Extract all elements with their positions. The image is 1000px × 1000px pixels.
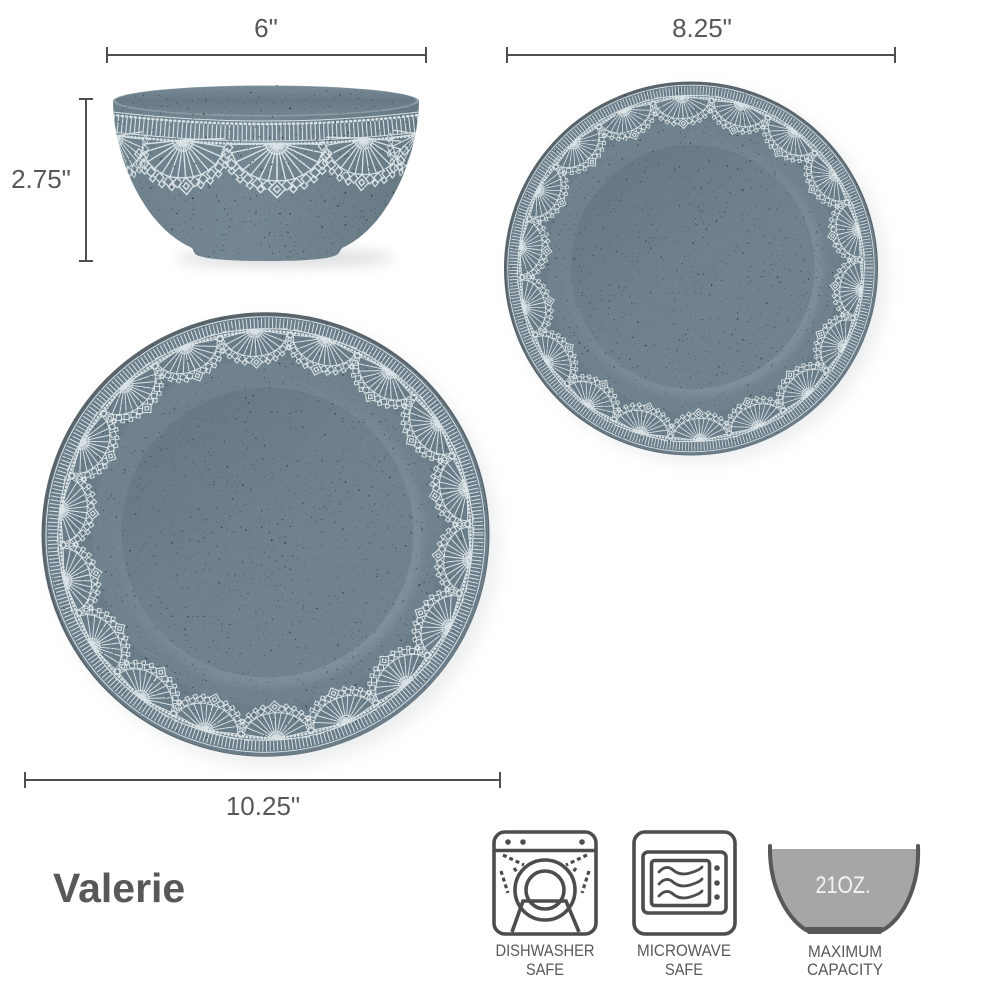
label: maximum capacity: CAPACITY: [807, 960, 883, 979]
label: dishwasher safe: [496, 941, 594, 979]
icon: dishwasher safe: [494, 832, 596, 934]
dimension: bowl width 6 inches: 6": [254, 13, 278, 43]
icon: bowl capacity 21 oz: [770, 846, 918, 934]
icon: microwave safe: [634, 832, 735, 934]
label: microwave safe: [637, 941, 731, 979]
dimension: bowl width 6 inches: [107, 13, 426, 63]
bowl: speckled lace bowl with rim: [113, 85, 419, 272]
title: pattern name: Valerie: [53, 865, 185, 911]
label: maximum capacity: MAXIMUM: [808, 942, 882, 961]
large plate shadow: [53, 322, 497, 766]
dimension: bowl height 2.75 inches: [11, 99, 93, 261]
label: maximum capacity: [807, 942, 883, 979]
icon: bowl capacity 21 oz: 21OZ.: [816, 872, 870, 899]
dimension: large plate width 10.25 inches: [25, 772, 500, 821]
label: microwave safe: MICROWAVE: [637, 941, 731, 960]
large plate: 10.25 inch dinner plate: [42, 312, 497, 766]
small plate: 8.25 inch salad plate: [504, 81, 886, 462]
dimension: bowl height 2.75 inches: 2.75": [11, 164, 71, 194]
dimension: small plate width 8.25 inches: [507, 13, 895, 63]
label: dishwasher safe: SAFE: [526, 960, 564, 979]
small plate shadow: [514, 90, 886, 462]
label: dishwasher safe: DISHWASHER: [496, 941, 594, 960]
dimension: large plate width 10.25 inches: 10.25": [226, 791, 300, 821]
bowl shadow: [175, 250, 395, 266]
label: microwave safe: SAFE: [665, 960, 703, 979]
dimension: small plate width 8.25 inches: 8.25": [672, 13, 732, 43]
